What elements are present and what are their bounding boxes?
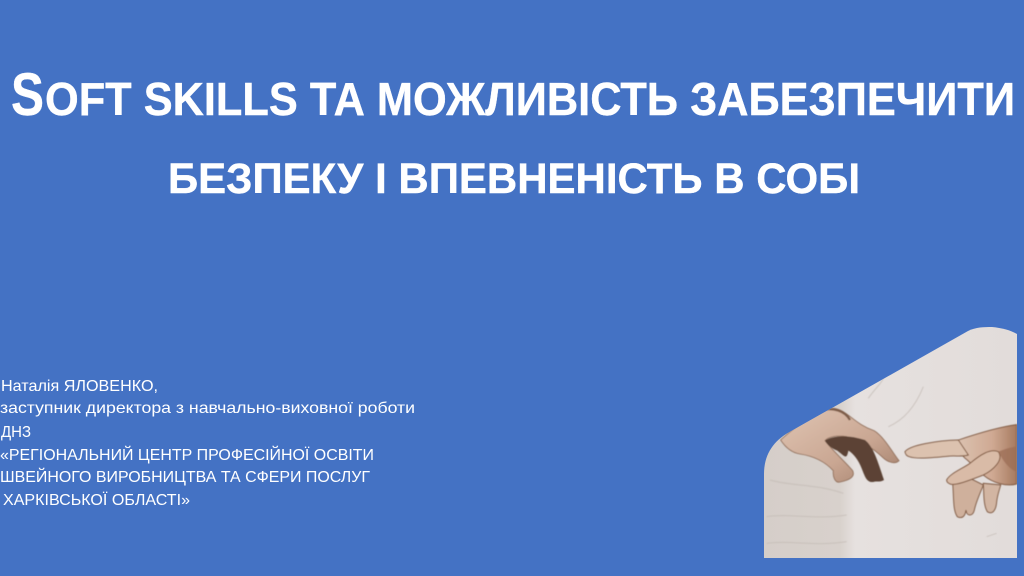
- title: [11, 61, 1015, 203]
- shadow between fingers: [999, 447, 1016, 470]
- index finger: [905, 440, 968, 458]
- author text block: Наталія ЯЛОВЕНКО,: [1, 378, 158, 395]
- lower fingers: [953, 477, 983, 518]
- author text block: ХАРКІВСЬКОЇ ОБЛАСТІ»: [3, 491, 190, 509]
- author text block: ДНЗ: [1, 424, 31, 441]
- left hand: [781, 408, 899, 482]
- title line 1: S: [11, 61, 44, 128]
- fresco texture: [767, 378, 997, 544]
- back of hand: [957, 425, 1017, 485]
- author text block: заступник директора з навчально-виховної роботи: [0, 400, 415, 417]
- thumb: [947, 451, 1000, 484]
- author text block: «РЕГІОНАЛЬНИЙ ЦЕНТР ПРОФЕСІЙНОЇ ОСВІТИ: [0, 445, 374, 464]
- author text block: ШВЕЙНОГО ВИРОБНИЦТВА ТА СФЕРИ ПОСЛУГ: [0, 467, 370, 486]
- title line 2: БЕЗПЕКУ І ВПЕВНЕНІСТЬ В СОБІ: [168, 155, 860, 203]
- image: hands reaching on fresco: [764, 327, 1017, 558]
- author text block: [0, 378, 415, 509]
- right hand: [905, 425, 1017, 518]
